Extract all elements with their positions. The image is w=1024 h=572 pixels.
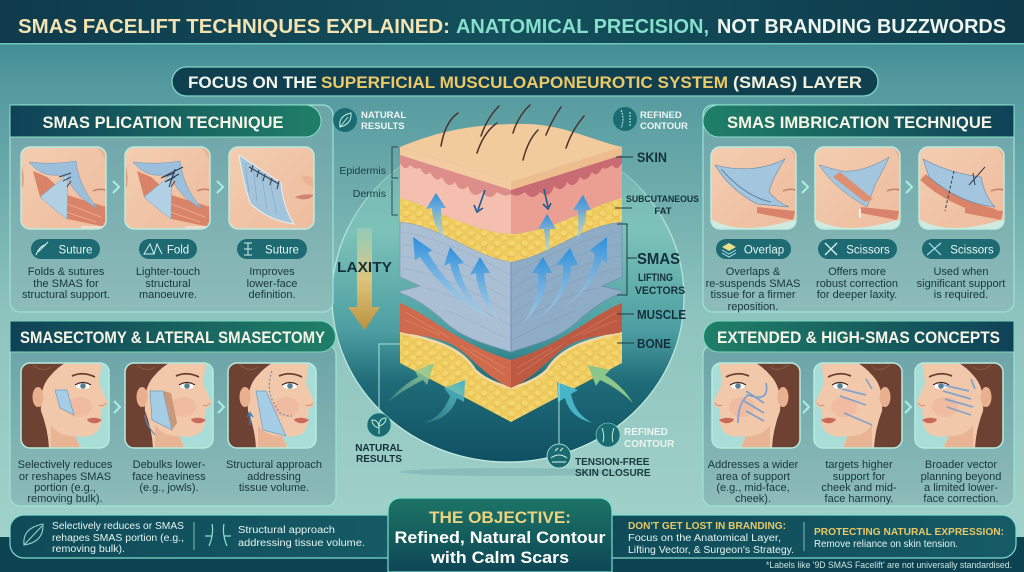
text: extended col 3: face correction. [923, 493, 999, 505]
card: fold step 2 [125, 147, 210, 229]
chevron [802, 181, 808, 193]
right layer labels: VECTORS [635, 285, 685, 297]
text: branding: Focus on the Anatomical Layer, [628, 533, 781, 544]
text: imbrication col 3: significant support [917, 278, 1005, 290]
chevron [113, 181, 119, 193]
objective panel: Refined, Natural Contour [394, 528, 606, 547]
pill: scissors 2 [922, 239, 1000, 259]
right layer labels: FAT [654, 206, 672, 217]
text: smasectomy col 3: tissue volume. [239, 482, 309, 494]
objective panel: with Calm Scars [430, 548, 569, 567]
text: smasectomy col 1: or reshapes SMAS [19, 471, 111, 483]
chevron [218, 401, 224, 413]
text: selective reduction: removing bulk). [52, 544, 125, 555]
pill: suture: Suture [59, 244, 92, 256]
small downward arrows [474, 189, 551, 212]
text: branding: Lifting Vector, & Surgeon's Strategy. [628, 545, 794, 556]
heading: smasectomy: SMASECTOMY & LATERAL SMASECTOMY [20, 329, 325, 347]
panel: extended and high-SMAS [703, 321, 1014, 506]
text: smasectomy col 3: Structural approach [226, 459, 322, 471]
hairs [441, 105, 584, 160]
text: extended col 1: cheek). [735, 493, 771, 505]
pill: scissors 2: Scissors [950, 244, 994, 256]
right layer labels: SKIN [637, 150, 667, 165]
icon: contour [205, 524, 231, 546]
right layer labels: MUSCLE [637, 308, 686, 322]
objective panel: THE OBJECTIVE: [429, 508, 571, 527]
icon label: refined contour top [613, 107, 688, 132]
title bar [0, 0, 1024, 44]
pill: suture [31, 239, 100, 259]
text: smasectomy col 2: Debulks lower- [133, 459, 206, 471]
icon label: refined contour top: CONTOUR [640, 121, 688, 132]
icon label: natural results top [333, 108, 406, 132]
title bar: SMAS FACELIFT TECHNIQUES EXPLAINED: [18, 16, 450, 38]
text: imbrication col 1: reposition. [728, 301, 778, 313]
text: smasectomy col 2: face heaviness [132, 471, 206, 483]
text: imbrication col 2: robust correction [816, 278, 898, 290]
center: anatomy circle [332, 132, 684, 462]
pill: suture 2 [237, 239, 307, 259]
chevron [905, 401, 911, 413]
text: plication col 2: manoeuvre. [139, 289, 197, 301]
left face [400, 147, 511, 422]
text: extended col 3: a limited lower- [924, 482, 998, 494]
right layer labels: SUBCUTANEOUS [626, 194, 699, 205]
heading: plication: SMAS PLICATION TECHNIQUE [42, 114, 284, 132]
text: extended col 3: Broader vector [925, 459, 997, 471]
text: protecting expression: PROTECTING NATURAL EXPRESSION: [814, 527, 1004, 538]
text: imbrication col 3: Used when [933, 266, 989, 278]
heading: extended: EXTENDED & HIGH-SMAS CONCEPTS [717, 329, 1000, 347]
text: structural approach: Structural approach [238, 525, 335, 536]
right layer labels: SMAS [637, 251, 680, 268]
card: wider support face [712, 363, 800, 448]
subtitle pill: (SMAS) LAYER [733, 74, 862, 92]
text: branding: DON'T GET LOST IN BRANDING: [628, 521, 786, 532]
card: suture step 1 [21, 147, 106, 229]
text: plication col 3: Improves [249, 266, 295, 278]
icon label: refined contour top: REFINED [640, 110, 682, 121]
text: imbrication col 1: Overlaps & [726, 266, 781, 278]
objective panel [388, 498, 612, 572]
skin layer cross-section block [388, 105, 633, 423]
text: structural approach: addressing tissue volume. [238, 538, 365, 549]
icon label: natural results top: NATURAL [361, 110, 406, 121]
card: suture step 3 [229, 147, 314, 229]
card: overlap [711, 147, 796, 229]
bottom left bar [10, 515, 410, 558]
left layer brackets and labels: Dermis [353, 188, 386, 200]
callout: natural results bottom: RESULTS [356, 454, 402, 465]
right layer labels: LIFTING [638, 272, 673, 284]
text: imbrication col 2: for deeper laxity. [817, 289, 897, 301]
left layer brackets and labels: Epidermis [339, 165, 386, 177]
heading: extended [704, 321, 1014, 352]
heading: plication [10, 105, 321, 137]
icon: leaf [24, 524, 43, 545]
text: imbrication col 3: is required. [934, 289, 988, 301]
text: plication col 1: Folds & sutures [28, 266, 105, 278]
chevron [803, 401, 809, 413]
text: plication col 1: the SMAS for [33, 278, 99, 290]
text: extended col 2: face harmony. [825, 493, 893, 505]
text: extended col 1: (e.g., mid-face, [716, 482, 790, 494]
pill: fold [139, 239, 197, 259]
card: broader vector face [915, 363, 1003, 448]
text: imbrication col 2: Offers more [828, 266, 886, 278]
pill: fold: Fold [167, 244, 189, 256]
text: protecting expression: Remove reliance on skin tension. [814, 539, 958, 550]
callout: refined contour bottom [596, 423, 675, 450]
ground shadow [400, 468, 620, 476]
callout: natural results bottom: NATURAL [355, 443, 403, 454]
chevron [906, 181, 912, 193]
heading: imbrication: SMAS IMBRICATION TECHNIQUE [727, 114, 992, 132]
right layer labels [615, 150, 699, 351]
text: plication col 1: structural support. [22, 289, 110, 301]
right face [511, 147, 622, 422]
text: smasectomy col 3: addressing [247, 471, 301, 483]
subtitle pill: FOCUS ON THE [188, 74, 317, 92]
bottom right bar [590, 515, 1016, 558]
pill: overlap [716, 239, 791, 259]
text: selective reduction: rehapes SMAS portion (e.g., [52, 533, 184, 544]
panel: smasectomy [10, 321, 336, 506]
card: face with lateral patch [228, 363, 316, 448]
lifting vector arrows [413, 193, 607, 323]
text: plication col 2: Lighter-touch [136, 266, 200, 278]
pill: scissors [818, 239, 897, 259]
panel: SMAS imbrication technique [703, 105, 1014, 313]
text: plication col 3: definition. [248, 289, 296, 301]
title bar: ANATOMICAL PRECISION, [456, 16, 709, 38]
title bar: NOT BRANDING BUZZWORDS [717, 16, 1006, 38]
pill: scissors: Scissors [846, 244, 890, 256]
text: extended col 1: Addresses a wider [708, 459, 799, 471]
left layer brackets and labels [339, 147, 398, 215]
right layer labels: BONE [637, 337, 671, 351]
footnote: *Labels like '9D SMAS Facelift' are not universally standardised. [766, 560, 1012, 570]
top skin surface [400, 124, 622, 182]
text: selective reduction: Selectively reduces or SMAS [52, 521, 184, 532]
text: smasectomy col 1: portion (e.g., [34, 482, 96, 494]
text: plication col 2: structural [145, 278, 191, 290]
callout: tension-free closure: SKIN CLOSURE [575, 468, 651, 479]
subtitle pill: SUPERFICIAL MUSCULOAPONEUROTIC SYSTEM [321, 74, 728, 92]
pill: overlap: Overlap [744, 244, 784, 256]
callout: refined contour bottom: CONTOUR [624, 439, 675, 450]
text: extended col 1: area of support [716, 471, 790, 483]
text: plication col 3: lower-face [247, 278, 297, 290]
panel: SMAS plication technique [10, 105, 333, 312]
laxity label and arrow: LAXITY [337, 259, 392, 276]
text: smasectomy col 2: (e.g., jowls). [139, 482, 199, 494]
card: scissors 2 [919, 147, 1004, 229]
subtitle pill [172, 67, 878, 96]
text: extended col 2: targets higher [825, 459, 893, 471]
card: face with jowl patch [125, 363, 213, 448]
text: extended col 2: support for [833, 471, 886, 483]
callout: tension-free closure [547, 382, 651, 479]
card: scissors [815, 147, 900, 229]
card: higher support face [814, 363, 902, 448]
callout: natural results bottom [355, 344, 403, 465]
pill: suture 2: Suture [265, 244, 299, 256]
text: imbrication col 1: tissue for a firmer [711, 289, 796, 301]
callout: refined contour bottom: REFINED [624, 427, 668, 438]
text: extended col 3: planning beyond [921, 471, 1001, 483]
text: imbrication col 1: re-suspends SMAS [706, 278, 800, 290]
heading: smasectomy [10, 321, 336, 352]
laxity label and arrow [337, 228, 392, 330]
text: smasectomy col 1: Selectively reduces [18, 459, 113, 471]
chevron [217, 181, 223, 193]
text: extended col 2: cheek and mid- [821, 482, 897, 494]
card: face with cheek patch [21, 363, 109, 448]
icon label: natural results top: RESULTS [361, 121, 405, 132]
upward support arrows [388, 363, 633, 423]
bottom dark band [0, 537, 1024, 572]
chevron [114, 401, 120, 413]
text: smasectomy col 1: removing bulk). [27, 493, 103, 505]
callout: tension-free closure: TENSION-FREE [575, 457, 650, 468]
heading: imbrication [703, 105, 1014, 137]
